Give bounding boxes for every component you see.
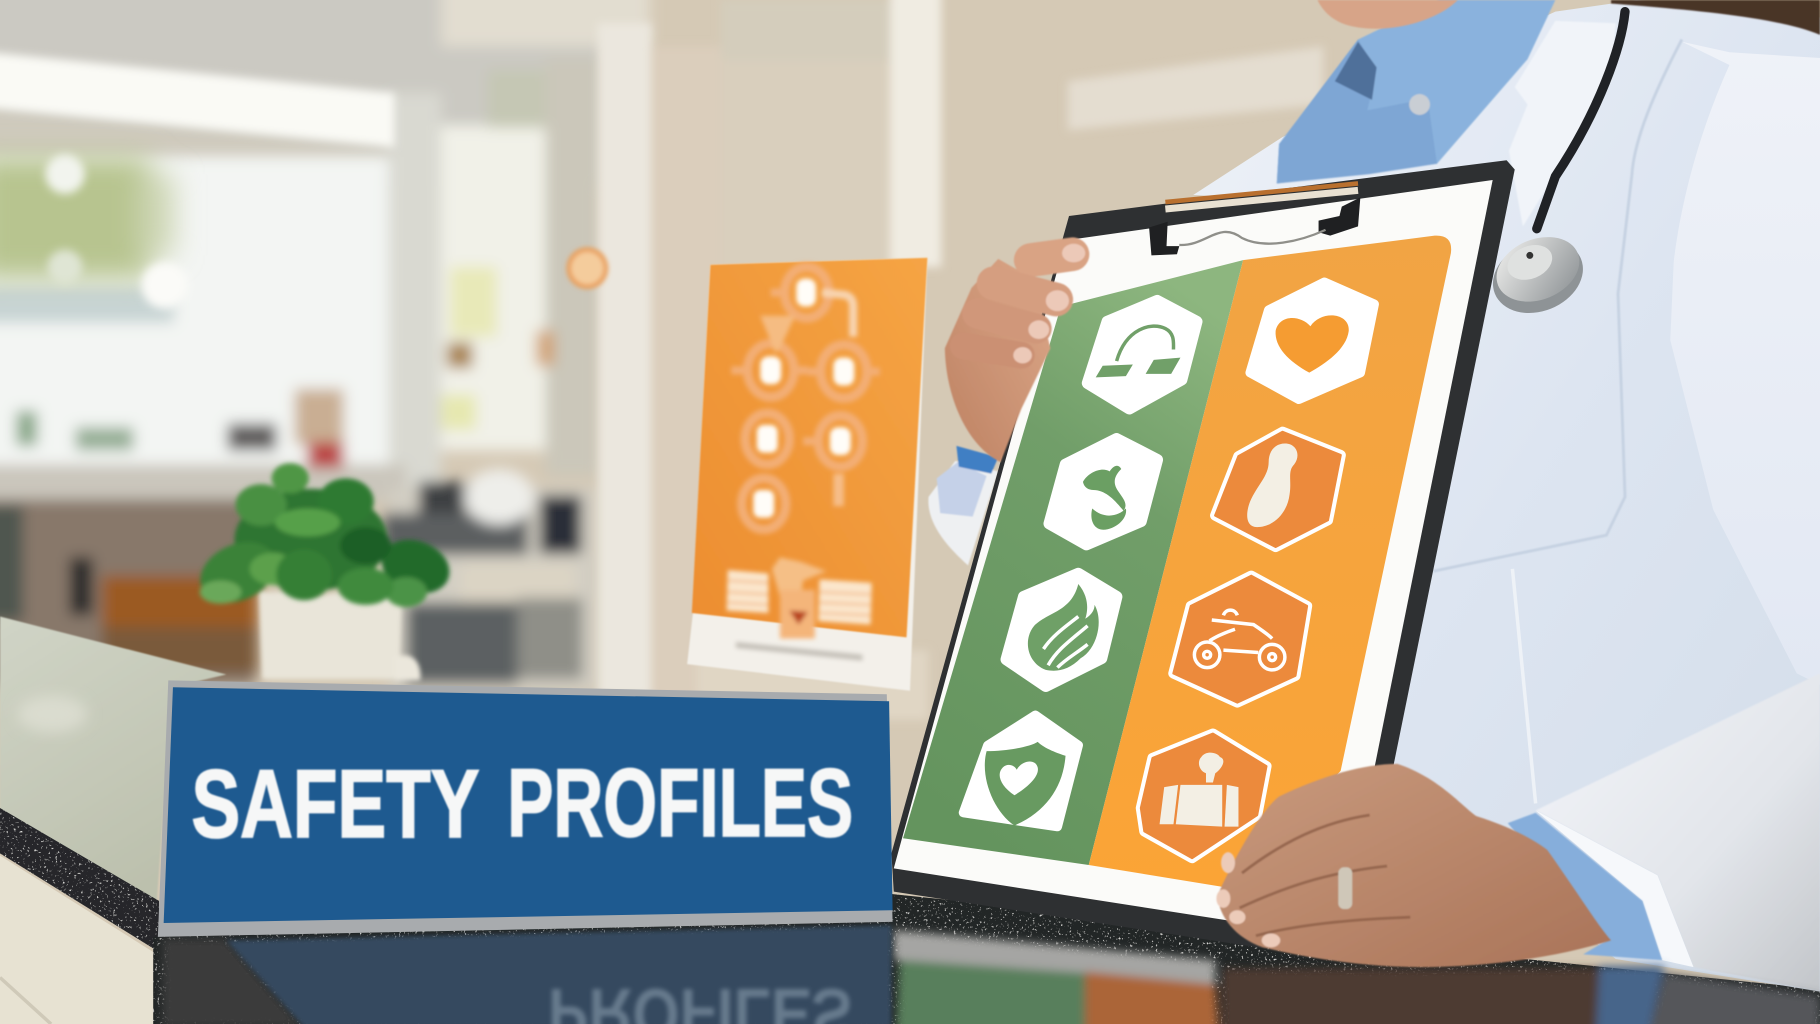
sign panel xyxy=(164,687,893,923)
wedding ring xyxy=(1338,867,1352,909)
clipboard board xyxy=(891,160,1515,949)
fingernails xyxy=(1216,852,1280,947)
background orange poster xyxy=(687,258,927,691)
lamp glow xyxy=(566,247,608,289)
orange column xyxy=(1089,236,1451,888)
plant in white pot xyxy=(190,463,457,680)
poster paper xyxy=(687,258,927,691)
counter edge xyxy=(0,808,159,952)
clipboard paper xyxy=(894,180,1493,921)
dark polished counter xyxy=(153,894,1820,1024)
coat: doctor's white coat xyxy=(1193,0,1820,991)
icon hexagon: bowling pin xyxy=(1215,432,1341,547)
sign reflection xyxy=(162,925,891,1024)
coat sleeve xyxy=(1670,42,1820,685)
clipboard clip xyxy=(1149,183,1360,255)
icon hexagon: leaf xyxy=(1049,439,1157,545)
coat lapel xyxy=(1509,21,1616,226)
icon hexagon: car xyxy=(1173,576,1307,702)
sign frame xyxy=(158,680,893,937)
coat pocket xyxy=(1433,39,1682,571)
sign heading: PROFILES xyxy=(507,750,853,857)
left sleeve cuff xyxy=(928,446,998,565)
shirt collar xyxy=(1277,0,1555,183)
hair xyxy=(1611,0,1820,35)
counter top, left xyxy=(0,616,226,902)
stethoscope xyxy=(1482,12,1625,326)
leaves xyxy=(190,463,457,614)
pot xyxy=(259,590,421,680)
sign heading xyxy=(192,750,853,858)
left hand holding clipboard xyxy=(945,244,1085,462)
fingernails xyxy=(1013,244,1085,363)
face, chin xyxy=(1317,0,1458,29)
green column xyxy=(903,260,1243,865)
finger creases xyxy=(1240,815,1410,936)
poster orange panel xyxy=(692,258,927,637)
white cabinet xyxy=(0,856,153,1024)
icon hexagon: heart xyxy=(1250,282,1374,399)
coat lower sleeve xyxy=(1536,673,1820,991)
fingers xyxy=(963,254,1072,355)
icon hexagon: headset xyxy=(1088,301,1197,409)
right hand on clipboard xyxy=(1216,764,1611,967)
bright ceiling light strip xyxy=(0,51,395,147)
sign: Safety Profiles xyxy=(158,680,893,937)
blue shirt cuff xyxy=(1508,813,1662,960)
icon hexagon: flame xyxy=(1006,574,1117,686)
icon hexagon: shield with heart xyxy=(963,715,1078,827)
poster flowchart icons xyxy=(727,267,880,639)
icon hexagon: medical kit xyxy=(1141,734,1266,858)
counter reflections xyxy=(894,930,1820,1024)
window foliage with bokeh xyxy=(0,157,174,279)
poster caption smudge xyxy=(736,642,862,661)
sign heading: SAFETY xyxy=(192,751,479,858)
